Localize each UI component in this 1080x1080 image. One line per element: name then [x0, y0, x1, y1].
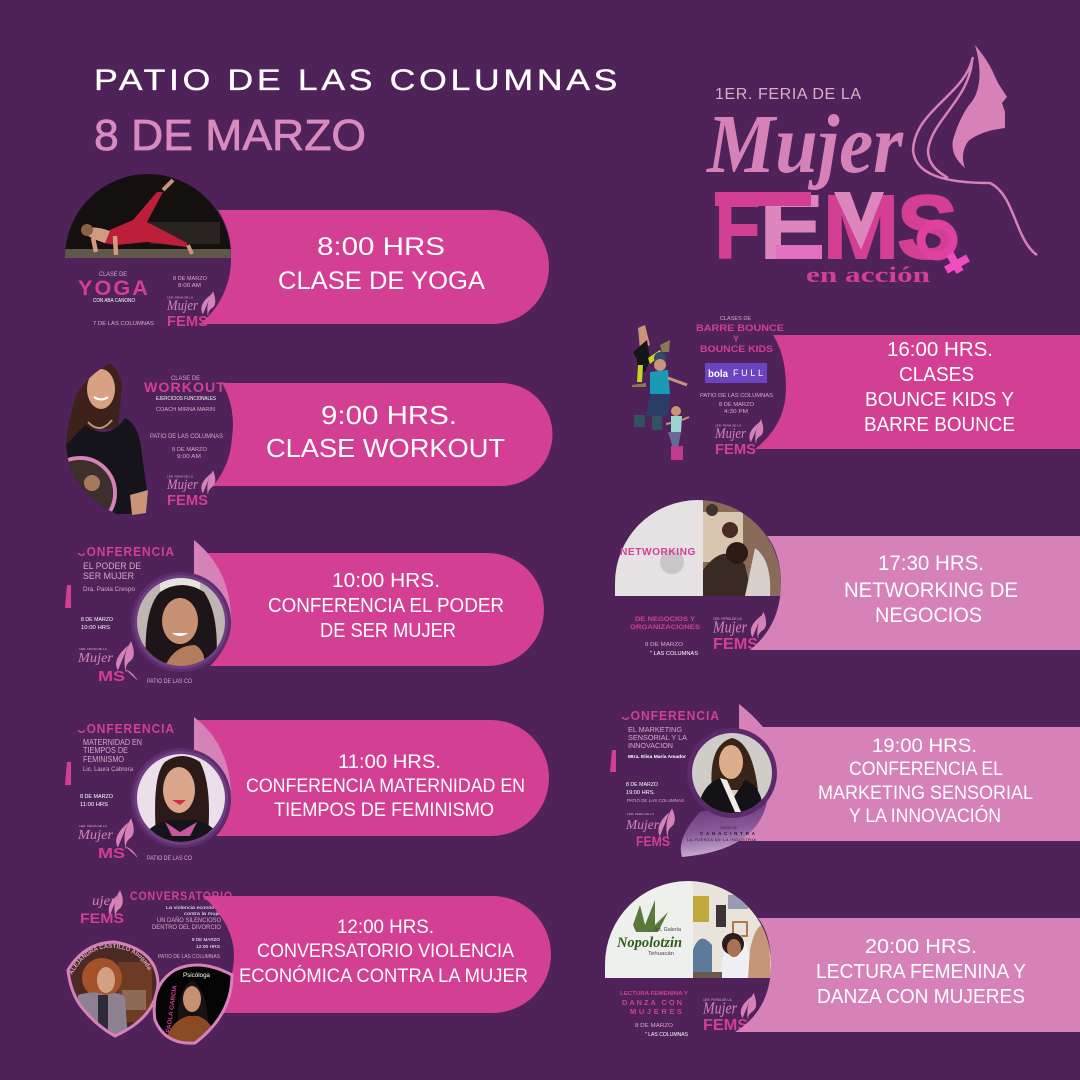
card text: PATIO DE LAS COLUMNAS [700, 393, 773, 399]
card text: 11:00 HRS [80, 802, 108, 808]
mini logo: 1ER. FERIA DE LA [715, 424, 741, 428]
mini logo: FEMS [703, 1017, 748, 1034]
workout card text: 9:00 AM [177, 454, 201, 460]
pill text: DANZA CON MUJERES [817, 986, 1025, 1008]
card text [618, 708, 720, 803]
speaker photo: psicologa: PAOLA GARCÍA [164, 984, 179, 1033]
pill text: BOUNCE KIDS Y [865, 389, 1014, 411]
sponsor logo: bola [708, 369, 728, 380]
workout card text: CLASE DE [171, 376, 200, 382]
light wedge [194, 717, 231, 798]
mini logo: 1ER. FERIA DE LA [79, 647, 107, 651]
panel: 12:00 conversatorio [66, 890, 551, 1045]
pill text: CONFERENCIA EL [849, 759, 1003, 780]
card text: ORGANIZACIONES [630, 624, 701, 631]
card text: 12:00 HRS [196, 944, 220, 949]
mini logo [625, 809, 674, 849]
logo face silhouette [952, 45, 1007, 168]
panel: 11:00 conferencia [65, 717, 549, 862]
gallery photo: Nopolotzin [616, 935, 682, 951]
mini logo: FEMS [715, 442, 756, 458]
mini logo: 1ER. FERIA DE LA [79, 824, 107, 828]
mini logo: 1ER. FERIA DE LA [703, 998, 732, 1002]
bounce kids figures [632, 325, 689, 460]
card text [620, 991, 688, 1038]
card text: Lic. Laura Cabrera [83, 767, 134, 773]
yoga card text: CON ABA CANONO [93, 298, 135, 304]
pill text [239, 917, 528, 987]
light wedge [194, 540, 231, 620]
mini logo [77, 819, 137, 862]
pill text: CLASE DE YOGA [278, 267, 485, 295]
mini logo: 1ER. FERIA DE LA [627, 812, 654, 816]
card text: DENTRO DEL DIVORCIO [152, 925, 221, 931]
mini logo [166, 292, 215, 330]
pill text: ECONÓMICA CONTRA LA MUJER [239, 965, 528, 987]
card text: CONFERENCIA [621, 709, 720, 723]
pill text: 20:00 HRS. [865, 936, 977, 958]
pill text: TIEMPOS DE FEMINISMO [274, 800, 494, 821]
pill text: LECTURA FEMENINA Y [816, 961, 1026, 983]
panel: 20:00 lectura [605, 881, 1080, 1038]
logo hair strands [913, 57, 1037, 255]
mini logo: Mujer [77, 651, 114, 666]
gallery photo: Art. Galería [654, 927, 681, 933]
speaker photo: abogada: ALEJANDRA CASTILLO Abogada [69, 944, 151, 975]
workout card text: EJERCICIOS FUNCIONALES [156, 396, 217, 402]
sponsor logo [705, 363, 767, 383]
card text: 8 DE MARZO [645, 642, 684, 648]
pill text [816, 936, 1026, 1008]
yoga card text: YOGA [78, 277, 150, 300]
card text: Y [733, 334, 739, 344]
logo FEMS letters: F [715, 178, 760, 278]
pill: 8:00 [200, 210, 549, 324]
mini logo [702, 994, 756, 1034]
pill text: NETWORKING DE [844, 579, 1018, 602]
card text: contra la mujer [184, 911, 223, 916]
pink tick [610, 750, 616, 772]
mini logo: FEMS [713, 636, 758, 653]
mini logo [714, 420, 763, 458]
pink tick [65, 585, 71, 608]
mini logo: Mujer [625, 818, 660, 833]
card text: " LAS COLUMNAS [650, 651, 698, 657]
card text: BOUNCE KIDS [700, 344, 773, 355]
pill text: 9:00 HRS. [321, 400, 457, 430]
sponsor text: CANACINTRA [700, 831, 756, 836]
card text: Mtra. Elisa María Amador [628, 754, 686, 759]
card text: 8 DE MARZO [719, 402, 755, 408]
card text: BARRE BOUNCE [696, 323, 784, 334]
logo: 1er Feria de la Mujer FEMS en accion [705, 45, 1037, 287]
yoga card text: 7 DE LAS COLUMNAS [93, 321, 154, 327]
pill text: Y LA INNOVACIÓN [849, 805, 1001, 827]
card text: CONFERENCIA [77, 722, 175, 736]
pill text: 17:30 HRS. [878, 552, 984, 575]
mini logo: FEMS [167, 493, 208, 509]
pill text: CLASE WORKOUT [266, 433, 505, 463]
card text: SER MUJER [83, 571, 134, 581]
panel: 17:30 networking [615, 500, 1080, 657]
pill text: DE SER MUJER [320, 620, 456, 642]
speaker photo [131, 572, 231, 672]
pill text [864, 339, 1015, 436]
mini logo: MS [98, 668, 125, 685]
pill text [818, 736, 1033, 827]
pill text: 8:00 HRS [317, 233, 445, 261]
card text: SENSORIAL Y LA [628, 733, 687, 742]
pill text: 19:00 HRS. [872, 736, 977, 757]
workout card text: COACH MIRNA MARIN [156, 407, 215, 413]
panel: 19:00 conferencia [610, 704, 1080, 857]
pill text: 16:00 HRS. [887, 339, 993, 361]
speaker photo and swoosh [681, 728, 777, 857]
card text: 8 DE MARZO [81, 617, 114, 623]
logo script word: Mujer [705, 98, 904, 191]
mini logo: Mujer [77, 828, 114, 843]
pill text: NEGOCIOS [875, 604, 982, 627]
card text: 8 DE MARZO [635, 1023, 674, 1029]
workout photo [66, 364, 148, 515]
pill text [268, 570, 504, 642]
card text: PATIO DE LAS COLUMNAS [158, 954, 221, 960]
pill: 12:00 [203, 896, 551, 1013]
pill text: CONFERENCIA MATERNIDAD EN [246, 776, 525, 797]
card text: CONFERENCIA [77, 545, 175, 559]
card text: 19:00 HRS. [626, 790, 655, 796]
workout card text: 8 DE MARZO [172, 447, 208, 453]
card text: EL MARKETING [628, 725, 682, 734]
card text: 8 DE MARZO [626, 782, 659, 788]
card text: NETWORKING [620, 547, 696, 558]
card text: CONVERSATORIO [130, 891, 233, 903]
gallery photo: Tehuacán [648, 951, 674, 957]
card text: Dra. Paola Crespo [83, 587, 136, 593]
workout card text: PATIO DE LAS COLUMNAS [150, 434, 223, 440]
mini logo: FEMS [167, 314, 208, 330]
speaker photo: abogada [66, 940, 160, 1038]
logo tagline: en acción [806, 262, 930, 287]
mini logo: 1ER. FERIA DE LA [713, 617, 742, 621]
card text: MATERNIDAD EN [83, 738, 142, 747]
pill: 11:00 [194, 720, 549, 836]
card text: La violencia económica [166, 905, 224, 910]
mini logo: FEMS [80, 910, 124, 926]
pill text: CONVERSATORIO VIOLENCIA [257, 941, 514, 962]
mini logo: ujer [92, 894, 117, 909]
logo FEMS letters: E [760, 178, 823, 278]
card text: " LAS COLUMNAS [645, 1032, 688, 1038]
mini logo: MS [98, 845, 125, 862]
pill: 10:00 [194, 553, 544, 666]
mini logo [77, 642, 137, 685]
pill: 16:00 [755, 335, 1080, 449]
yoga card text: 8:00 AM [178, 283, 201, 289]
logo caption: 1ER. FERIA DE LA [715, 86, 861, 103]
sponsor text [687, 825, 756, 842]
logo FEMS letters: S [897, 178, 958, 278]
card text: INNOVACION [628, 741, 673, 750]
sponsor text: UNIÓN DE [720, 825, 738, 830]
yoga photo [65, 174, 231, 258]
pink tick [65, 762, 71, 785]
card text [130, 891, 233, 960]
logo FEMS letters [715, 178, 958, 278]
card text: MUJERES [630, 1007, 682, 1016]
yoga card text: 8 DE MARZO [173, 276, 208, 282]
networking photo [615, 500, 781, 596]
pill text: MARKETING SENSORIAL [818, 783, 1033, 804]
card text: TIEMPOS DE [83, 746, 128, 755]
card text: DANZA CON [622, 998, 682, 1007]
speaker photo: psicologa [152, 964, 234, 1045]
card text [620, 547, 701, 657]
mini logo [80, 891, 124, 926]
mini logo: 1ER. FERIA DE LA [167, 296, 193, 300]
yoga card text [78, 272, 208, 327]
panel: 8:00 yoga [65, 174, 549, 330]
card text: 8 DE MARZO [192, 937, 220, 942]
pill: 9:00 [213, 383, 552, 486]
sponsor logo: FULL [733, 368, 763, 378]
sponsor text: LA FUERZA DE LA INDUSTRIA [687, 837, 756, 842]
mini logo: Mujer [714, 426, 746, 442]
card text [74, 544, 192, 685]
mini logo [712, 613, 766, 653]
card text: 10:00 HRS [81, 625, 110, 631]
yoga card text: CLASE DE [99, 272, 127, 278]
pill: 19:00 [739, 704, 1080, 841]
icon: female symbol [921, 224, 968, 272]
workout card text: WORKOUT [144, 379, 226, 395]
panel: 9:00 workout [66, 364, 552, 515]
pill text: 12:00 HRS. [337, 917, 434, 938]
card text: DE NEGOCIOS Y [635, 616, 696, 623]
pill text [266, 400, 505, 463]
card text: PATIO DE LAS CO [147, 679, 192, 685]
card text: FEMINISMO [83, 755, 124, 764]
card text: 8 DE MARZO [80, 794, 114, 800]
workout card text [144, 376, 226, 460]
gallery photo [605, 881, 771, 978]
pill text [844, 552, 1018, 627]
pill text: 10:00 HRS. [332, 570, 440, 592]
card text: EL PODER DE [83, 561, 141, 571]
speaker photo [131, 748, 231, 848]
card text: PATIO DE LAS COLUMNAS [627, 798, 684, 803]
card text: LECTURA FEMENINA Y [620, 991, 688, 997]
date heading: 8 DE MARZO [94, 111, 366, 160]
logo FEMS letters: M [823, 178, 899, 278]
mini logo: 1ER. FERIA DE LA [167, 474, 193, 478]
mini logo: Mujer [166, 477, 198, 493]
card text: 4:30 PM [724, 409, 748, 415]
mini logo: Mujer [702, 998, 738, 1017]
card text: PATIO DE LAS CO [147, 856, 192, 862]
pill text: 11:00 HRS. [338, 752, 441, 773]
mini logo: FEMS [636, 833, 670, 849]
mini logo: Mujer [712, 617, 748, 636]
card text: UN DAÑO SILENCIOSO [157, 917, 221, 924]
speaker photo: psicologa: Psicóloga [183, 973, 211, 979]
pill text [278, 233, 485, 295]
pill text [246, 752, 525, 821]
pill text: CONFERENCIA EL PODER [268, 595, 504, 617]
panel: 16:00 bounce [632, 316, 1080, 460]
title: PATIO DE LAS COLUMNAS [94, 64, 621, 97]
pill: 17:30 [750, 536, 1080, 650]
panel: 10:00 conferencia [65, 540, 544, 685]
pill text: CLASES [899, 364, 974, 386]
mini logo: Mujer [166, 298, 198, 314]
pill: 20:00 [735, 918, 1080, 1032]
mini logo [166, 471, 215, 509]
card text [74, 721, 192, 862]
card text [696, 316, 784, 415]
pill text: BARRE BOUNCE [864, 414, 1015, 436]
card text: CLASES DE [720, 316, 751, 322]
